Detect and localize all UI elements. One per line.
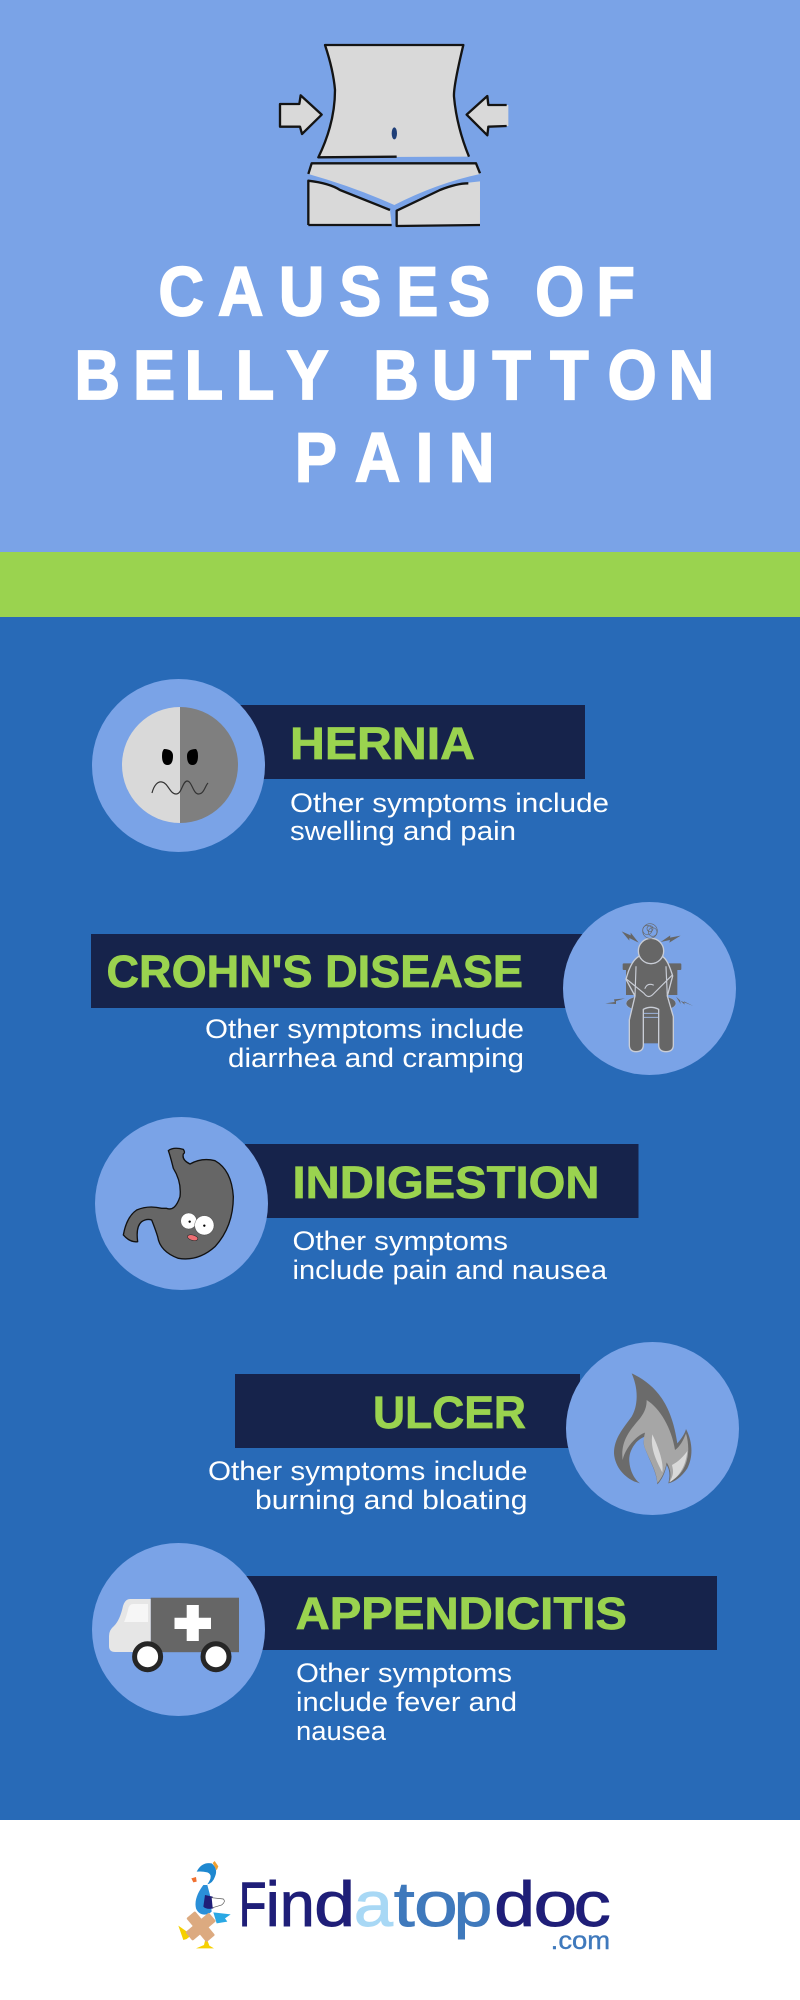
crohn's text: diarrhea and cramping	[228, 1043, 524, 1073]
logo: .com: .com	[551, 1927, 610, 1955]
panel: footer background	[0, 1820, 800, 2000]
title: CAUSES OF	[158, 253, 635, 331]
appendicitis heading bar	[240, 1576, 717, 1650]
logo: Findatopdoc wordmark: p	[454, 1870, 492, 1940]
hernia icon circle	[92, 679, 265, 852]
appendicitis text: Other symptoms	[296, 1658, 512, 1688]
appendicitis text	[296, 1658, 517, 1746]
logo: Findatopdoc wordmark	[239, 1869, 611, 1940]
hernia heading: HERNIA	[290, 718, 475, 769]
crohn's heading bar	[91, 934, 591, 1008]
panel: header background	[0, 0, 800, 552]
ulcer text: burning and bloating	[255, 1485, 528, 1515]
hernia text: swelling and pain	[290, 816, 516, 846]
icon: ambulance	[109, 1598, 239, 1670]
logo: Findatopdoc wordmark: t	[394, 1869, 415, 1940]
icon: waist with arrows	[280, 45, 508, 226]
logo: Findatopdoc wordmark: d	[314, 1869, 355, 1940]
hernia text	[290, 788, 609, 846]
panel: ulcer	[208, 1342, 739, 1515]
ulcer icon circle	[566, 1342, 739, 1515]
panel: indigestion	[95, 1117, 638, 1290]
ulcer heading bar	[235, 1374, 580, 1448]
ulcer text	[208, 1456, 528, 1515]
title: PAIN	[295, 419, 494, 497]
appendicitis text: include fever and	[296, 1687, 517, 1717]
ulcer heading: ULCER	[373, 1387, 526, 1438]
panel: crohn's disease	[91, 902, 736, 1075]
logo: Findatopdoc wordmark: o	[534, 1869, 577, 1940]
logo: Findatopdoc wordmark: c	[574, 1869, 611, 1940]
logo: Findatopdoc wordmark: n	[280, 1870, 315, 1940]
indigestion text	[292, 1226, 608, 1285]
green divider band	[0, 552, 800, 617]
appendicitis heading: APPENDICITIS	[296, 1588, 627, 1639]
logo: Findatopdoc wordmark: F	[239, 1869, 266, 1940]
panel: hernia	[92, 679, 609, 852]
icon: flame	[614, 1373, 691, 1484]
hernia text: Other symptoms include	[290, 788, 609, 818]
indigestion text: Other symptoms	[292, 1226, 508, 1256]
panel: appendicitis	[92, 1543, 717, 1746]
logo: duck mascot	[178, 1861, 231, 1949]
logo: Findatopdoc wordmark: a	[354, 1869, 394, 1940]
panel: causes background	[0, 617, 800, 1820]
ulcer text: Other symptoms include	[208, 1456, 528, 1486]
crohn's text: Other symptoms include	[205, 1014, 524, 1044]
appendicitis icon circle	[92, 1543, 265, 1716]
crohn's icon circle	[563, 902, 736, 1075]
title: BELLY BUTTON	[75, 337, 714, 415]
indigestion heading: INDIGESTION	[292, 1157, 600, 1208]
hernia heading bar	[240, 705, 585, 779]
crohn's text	[205, 1014, 524, 1073]
logo: Findatopdoc wordmark: d	[494, 1869, 535, 1940]
indigestion heading bar	[245, 1144, 638, 1218]
logo: Findatopdoc wordmark: i	[266, 1870, 280, 1940]
icon: person on toilet	[605, 924, 693, 1052]
indigestion text: include pain and nausea	[292, 1255, 608, 1285]
appendicitis text: nausea	[296, 1716, 387, 1746]
icon: worried face	[122, 707, 238, 823]
crohn's heading: CROHN'S DISEASE	[106, 946, 523, 997]
indigestion icon circle	[95, 1117, 268, 1290]
logo: Findatopdoc wordmark: o	[414, 1869, 458, 1940]
title	[75, 253, 714, 497]
icon: stomach character	[123, 1148, 233, 1259]
